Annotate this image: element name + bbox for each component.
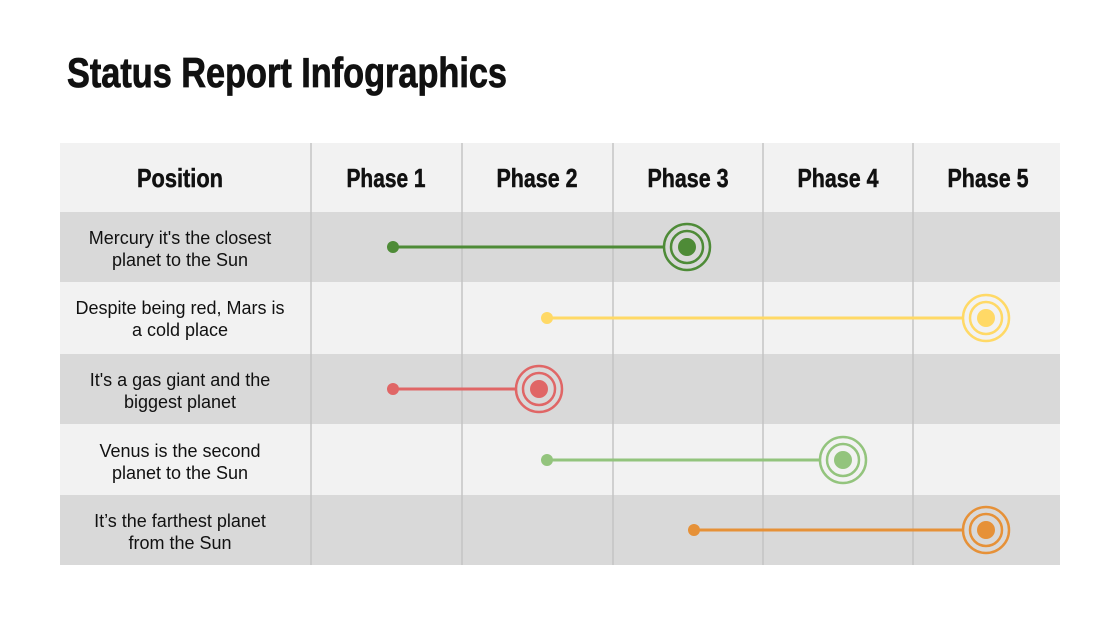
row labels: a cold place [132,320,228,340]
timeline: Jupiter [387,366,562,412]
row labels: planet to the Sun [112,463,248,483]
row labels: Venus is the second [99,441,261,461]
row labels: from the Sun [128,533,232,553]
header row [137,163,1028,193]
title: Status Report Infographics [67,49,507,96]
row labels: It’s the farthest planet [94,511,266,531]
row labels: Mercury it's the closest [89,228,271,248]
header row: Phase 1 [346,163,426,193]
header row: Position [137,163,223,193]
timeline: Mars [541,295,1009,341]
header row: Phase 3 [648,163,728,193]
row labels: biggest planet [124,392,236,412]
timeline: Mercury [387,224,710,270]
row labels: It's a gas giant and the [90,370,270,390]
header row: Phase 4 [798,163,879,193]
row labels: Despite being red, Mars is [75,298,285,318]
header row: Phase 2 [496,163,578,193]
timeline: Venus [541,437,866,483]
row labels: planet to the Sun [112,250,248,270]
header row: Phase 5 [948,163,1028,193]
timeline: Neptune [688,507,1009,553]
row labels [75,228,285,553]
table [60,143,1060,565]
